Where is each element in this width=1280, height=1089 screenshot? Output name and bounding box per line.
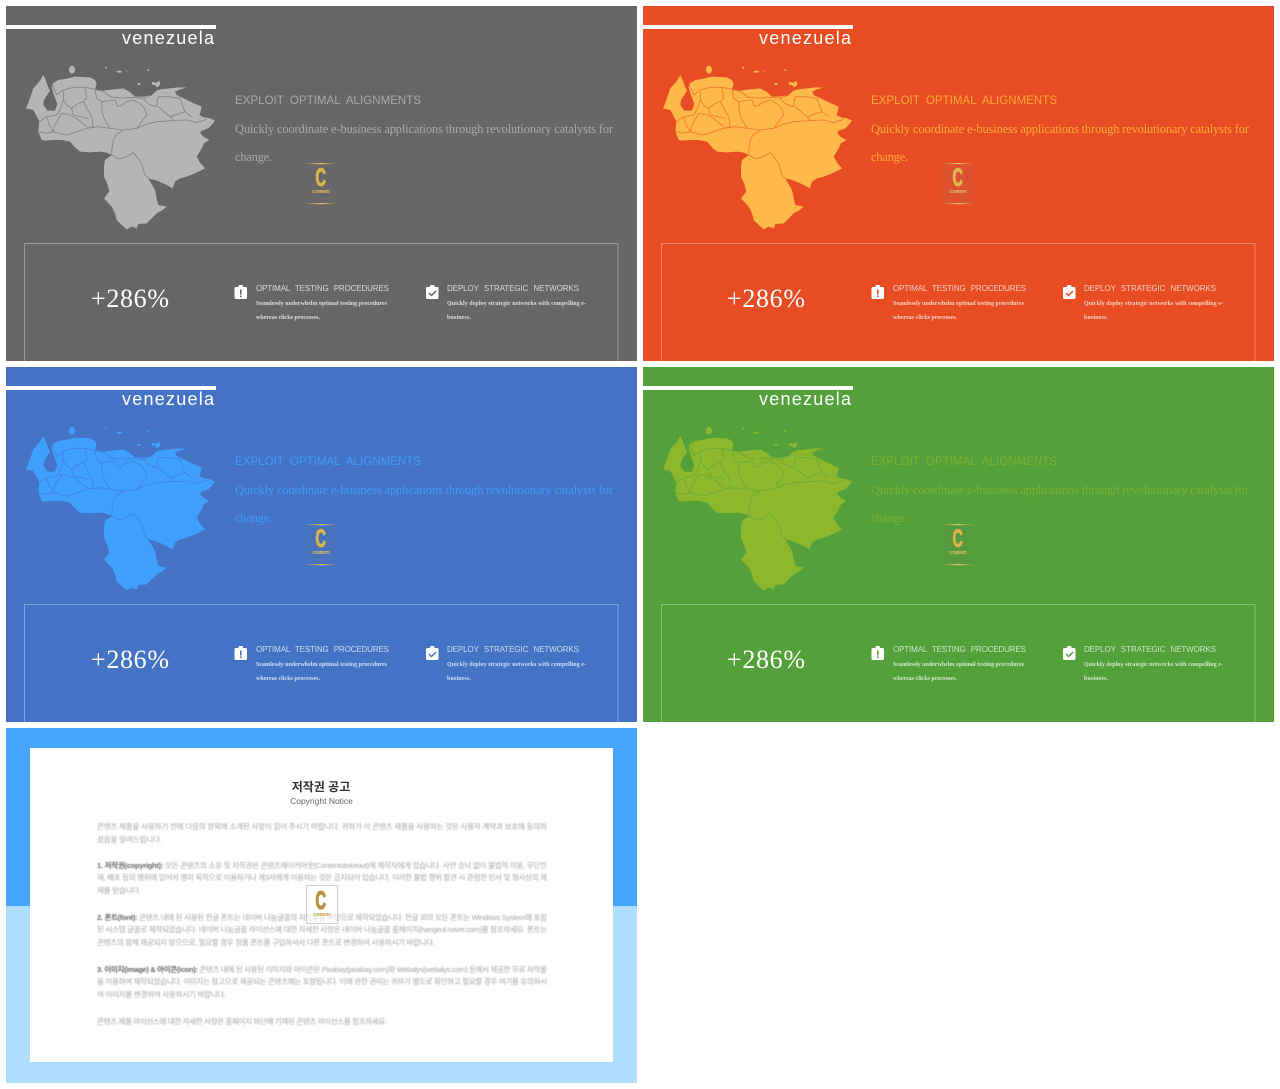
map of Venezuela [663,427,852,590]
copyright body text: 2. 폰트(font): 콘텐츠 내에 된 사용된 한글 폰트는 네이버 나눔글꼴의 저작물을 바탕으로 제작되었습니다. 한글 외의 모든 폰트는 Windows System에 포함 [97,912,547,922]
stat: +286%: +286% [91,284,169,313]
feature: deploy strategic networks [447,645,586,682]
copyright body text: 재, 배포 등의 행위에 있어서 영리 목적으로 이용하거나 제3자에게 이용하는 것은 금지되어 있습니다. 이러한 불법 행위 발견 시 준엄한 민사 및 형사상의 제 [97,872,547,882]
description text [871,122,1250,164]
copyright body text: 1. 저작권(copyright): 모든 콘텐츠의 소유 및 저작권은 콘텐츠메이커아웃(Contentstokeout)에 제작자에게 있습니다. 사전 승낙 없이 불법적 이용, 무단전 [97,860,547,870]
header bar [643,25,853,29]
feature: optimal testing procedures: OPTIMAL TESTING PROCEDURES [256,645,389,654]
description text: Quickly coordinate e-business applications through revolutionary catalysts for [235,483,614,497]
icon: clipboard check [426,285,438,299]
copyright body text: 재를 받습니다. [97,885,141,895]
heading: venezuela: venezuela [122,389,215,409]
feature: deploy strategic networks: business. [447,315,472,321]
watermark logo: CONTENTS [312,550,330,555]
feature: deploy strategic networks [447,284,586,321]
title: exploit optimal alignments: EXPLOIT OPTIMAL ALIGNMENTS [871,456,1057,468]
stat: +286%: +286% [727,284,805,313]
description text: Quickly coordinate e-business applications through revolutionary catalysts for [871,122,1250,136]
panel: orange slide [643,6,1274,361]
header bar [6,386,216,390]
panel: grey slide [6,6,637,361]
map of Venezuela [26,427,215,590]
copyright heading: Copyright Notice [290,796,353,806]
watermark logo [305,163,337,204]
stat: +286%: +286% [727,645,805,674]
description text: Quickly coordinate e-business applications through revolutionary catalysts for [235,122,614,136]
description text [235,483,614,525]
icon: clipboard alert [234,285,247,299]
stats box [24,604,618,722]
description text: change. [871,150,908,164]
panel: green slide [643,367,1274,722]
feature: optimal testing procedures [256,284,389,321]
heading: venezuela: venezuela [759,28,852,48]
title: exploit optimal alignments: EXPLOIT OPTIMAL ALIGNMENTS [871,95,1057,107]
stats box [662,604,1255,722]
feature: deploy strategic networks: DEPLOY STRATEGIC NETWORKS [447,284,579,293]
feature: deploy strategic networks: Quickly deploy strategic networks with compelling e- [447,662,586,668]
description text: change. [235,511,272,525]
header bar [6,25,216,29]
icon: clipboard check [1063,285,1076,299]
copyright body text: 콘텐츠 제품을 사용하기 전에 다음의 항목에 소개된 사항이 읽어 주시기 바랍니다. 귀하가 이 콘텐츠 제품을 사용하는 것은 사용자 계약과 보호에 동의하 [97,821,547,831]
watermark logo [942,524,974,565]
map of Venezuela [663,66,852,229]
map of Venezuela [26,66,215,229]
panel: blue slide [6,367,637,722]
copyright body text: 콘텐츠의 함께 제공되지 않으므로, 필요할 경우 정품 폰트를 구입하셔서 다른 폰트로 변경하여 사용하시기 바랍니다. [97,937,435,947]
feature: optimal testing procedures: Seamlessly underwhelm optimal testing procedures [256,301,388,307]
watermark logo: C [316,165,326,192]
description text: Quickly coordinate e-business applications through revolutionary catalysts for [871,483,1250,497]
feature: deploy strategic networks: business. [1084,676,1108,682]
feature: deploy strategic networks [1084,284,1223,321]
copyright body text: 콘텐츠 제품 라이선스에 대한 자세한 사항은 홈페이지 하단에 기재된 콘텐츠 라이선스를 참조하세요. [97,1016,387,1026]
copyright heading: 저작권 공고 [292,779,350,794]
watermark logo [306,886,338,924]
feature: deploy strategic networks: Quickly deploy strategic networks with compelling e- [447,301,586,307]
feature: deploy strategic networks: DEPLOY STRATEGIC NETWORKS [1084,645,1216,654]
watermark logo: CONTENTS [949,550,967,555]
feature: deploy strategic networks: DEPLOY STRATEGIC NETWORKS [1084,284,1216,293]
watermark logo: C [316,526,326,553]
copyright body text: 3. 이미지(image) & 아이콘(icon): 콘텐츠 내에 된 사용된 이미지와 아이콘은 Pixabay(pixabay.com)와 Webalys(webalys.com) 등에서 제공한 무료 저작물 [97,964,547,974]
stats box [662,244,1255,361]
feature: deploy strategic networks: DEPLOY STRATEGIC NETWORKS [447,645,579,654]
feature: optimal testing procedures: Seamlessly underwhelm optimal testing procedures [893,662,1025,668]
description text [871,483,1250,525]
watermark logo: C [952,165,963,192]
heading: venezuela: venezuela [122,28,215,48]
feature: deploy strategic networks: business. [1084,315,1108,321]
stat: +286%: +286% [91,645,169,674]
feature: deploy strategic networks [1084,645,1223,682]
feature: deploy strategic networks: business. [447,676,472,682]
icon: clipboard alert [234,646,247,660]
icon: clipboard check [1063,646,1076,660]
header bar [643,386,853,390]
copyright body text: 된 시스템 글꼴로 제작되었습니다. 네이버 나눔글꼴 라이선스에 대한 자세한 사항은 네이버 나눔글꼴 홈페이지(hangeul.naver.com)를 참조하세요. 폰트는 [97,924,547,934]
feature: deploy strategic networks: Quickly deploy strategic networks with compelling e- [1084,301,1223,307]
feature: optimal testing procedures: whereas clicks processes. [893,315,958,321]
feature: deploy strategic networks: Quickly deploy strategic networks with compelling e- [1084,662,1223,668]
copyright body text: 셨음을 알려드립니다. [97,834,162,844]
feature: optimal testing procedures: OPTIMAL TESTING PROCEDURES [893,645,1026,654]
stats box [24,244,618,361]
watermark logo: CONTENTS [949,189,967,194]
watermark logo [305,524,337,565]
description text [235,122,614,164]
watermark logo: CONTENTS [312,189,330,194]
copyright body text: 여 이미지를 변경하여 사용하시기 바랍니다. [97,989,226,999]
panel: copyright notice [6,728,637,1083]
watermark logo [942,163,974,204]
feature: optimal testing procedures [893,284,1026,321]
feature: optimal testing procedures: Seamlessly underwhelm optimal testing procedures [256,662,388,668]
feature: optimal testing procedures [256,645,389,682]
heading: venezuela: venezuela [759,389,852,409]
watermark logo: CONTENTS [313,912,331,917]
icon: clipboard alert [872,646,884,660]
feature: optimal testing procedures: whereas clicks processes. [256,676,320,682]
watermark logo: C [952,526,963,553]
description text: change. [871,511,908,525]
title: exploit optimal alignments: EXPLOIT OPTIMAL ALIGNMENTS [235,456,421,468]
feature: optimal testing procedures: Seamlessly underwhelm optimal testing procedures [893,301,1025,307]
watermark logo: C [316,888,326,915]
feature: optimal testing procedures: whereas clicks processes. [893,676,958,682]
copyright body text [97,821,547,1026]
icon: clipboard check [426,646,438,660]
title: exploit optimal alignments: EXPLOIT OPTIMAL ALIGNMENTS [235,95,421,107]
icon: clipboard alert [872,285,884,299]
feature: optimal testing procedures: whereas clicks processes. [256,315,320,321]
description text: change. [235,150,272,164]
feature: optimal testing procedures: OPTIMAL TESTING PROCEDURES [256,284,389,293]
copyright heading [290,779,353,806]
feature: optimal testing procedures [893,645,1026,682]
feature: optimal testing procedures: OPTIMAL TESTING PROCEDURES [893,284,1026,293]
copyright body text: 을 이용하여 제작되었습니다. 이미지는 참고으로 제공되는 콘텐츠에는 포함됩니다. 이에 관한 권리는 귀하가 별도로 확인하고 필요할 경우 여기를 유의하시 [97,976,547,986]
